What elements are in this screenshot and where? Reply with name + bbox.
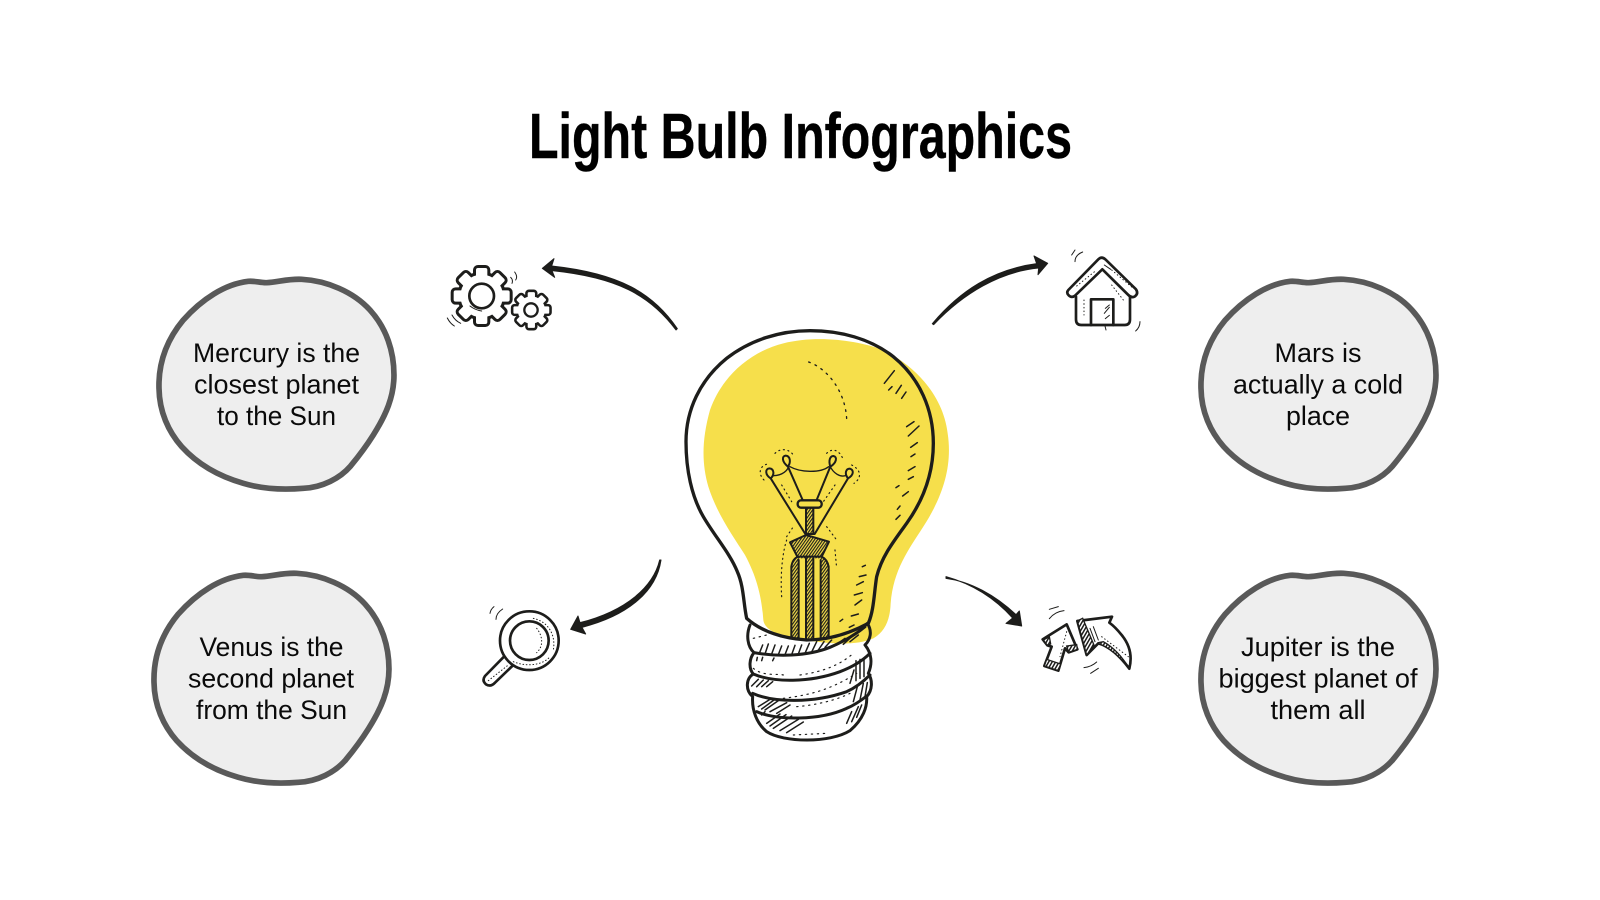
panel: Venus bbox=[154, 573, 389, 783]
bulb highlights and hatch marks bbox=[809, 362, 847, 419]
screw hatching bbox=[752, 635, 867, 733]
yellow glow bbox=[704, 339, 949, 644]
panel: Mars: actually a cold bbox=[1233, 370, 1403, 400]
panel: Jupiter: biggest planet of bbox=[1218, 664, 1418, 694]
arrow: to house bbox=[932, 256, 1048, 325]
panel: Mercury: closest planet bbox=[194, 370, 359, 400]
title: Light Bulb Infographics bbox=[529, 100, 1072, 172]
panel: Venus: second planet bbox=[188, 664, 354, 694]
filament bbox=[760, 450, 859, 638]
bulb glass outline bbox=[686, 331, 933, 640]
large arrow bbox=[1077, 617, 1131, 669]
panel: Jupiter: them all bbox=[1270, 695, 1366, 725]
panel: Venus: from the Sun bbox=[196, 695, 347, 725]
icon: gears bbox=[447, 268, 549, 328]
screw threads outline bbox=[747, 623, 871, 740]
bulb screw base bbox=[747, 623, 871, 740]
panel: Mars bbox=[1201, 279, 1436, 489]
panel: Mercury: Mercury is the bbox=[193, 338, 360, 368]
icon: house bbox=[1067, 250, 1140, 331]
small arrow bbox=[1043, 624, 1077, 671]
panel: Mars: Mars is bbox=[1274, 338, 1362, 368]
arrow: to magnifier bbox=[571, 560, 661, 634]
panel: Mercury: to the Sun bbox=[217, 401, 336, 431]
panel: Mercury bbox=[159, 279, 394, 489]
panel: Venus: Venus is the bbox=[200, 632, 344, 662]
arrow: to gears bbox=[542, 259, 677, 330]
panel: Jupiter: Jupiter is the bbox=[1241, 632, 1395, 662]
arrow: to arrows icon bbox=[946, 577, 1022, 626]
icon: magnifier bbox=[484, 607, 559, 686]
icon: two arrows bbox=[1043, 607, 1131, 673]
light bulb illustration bbox=[686, 331, 949, 740]
panel: Jupiter bbox=[1201, 573, 1436, 783]
panel: Mars: place bbox=[1286, 401, 1350, 431]
